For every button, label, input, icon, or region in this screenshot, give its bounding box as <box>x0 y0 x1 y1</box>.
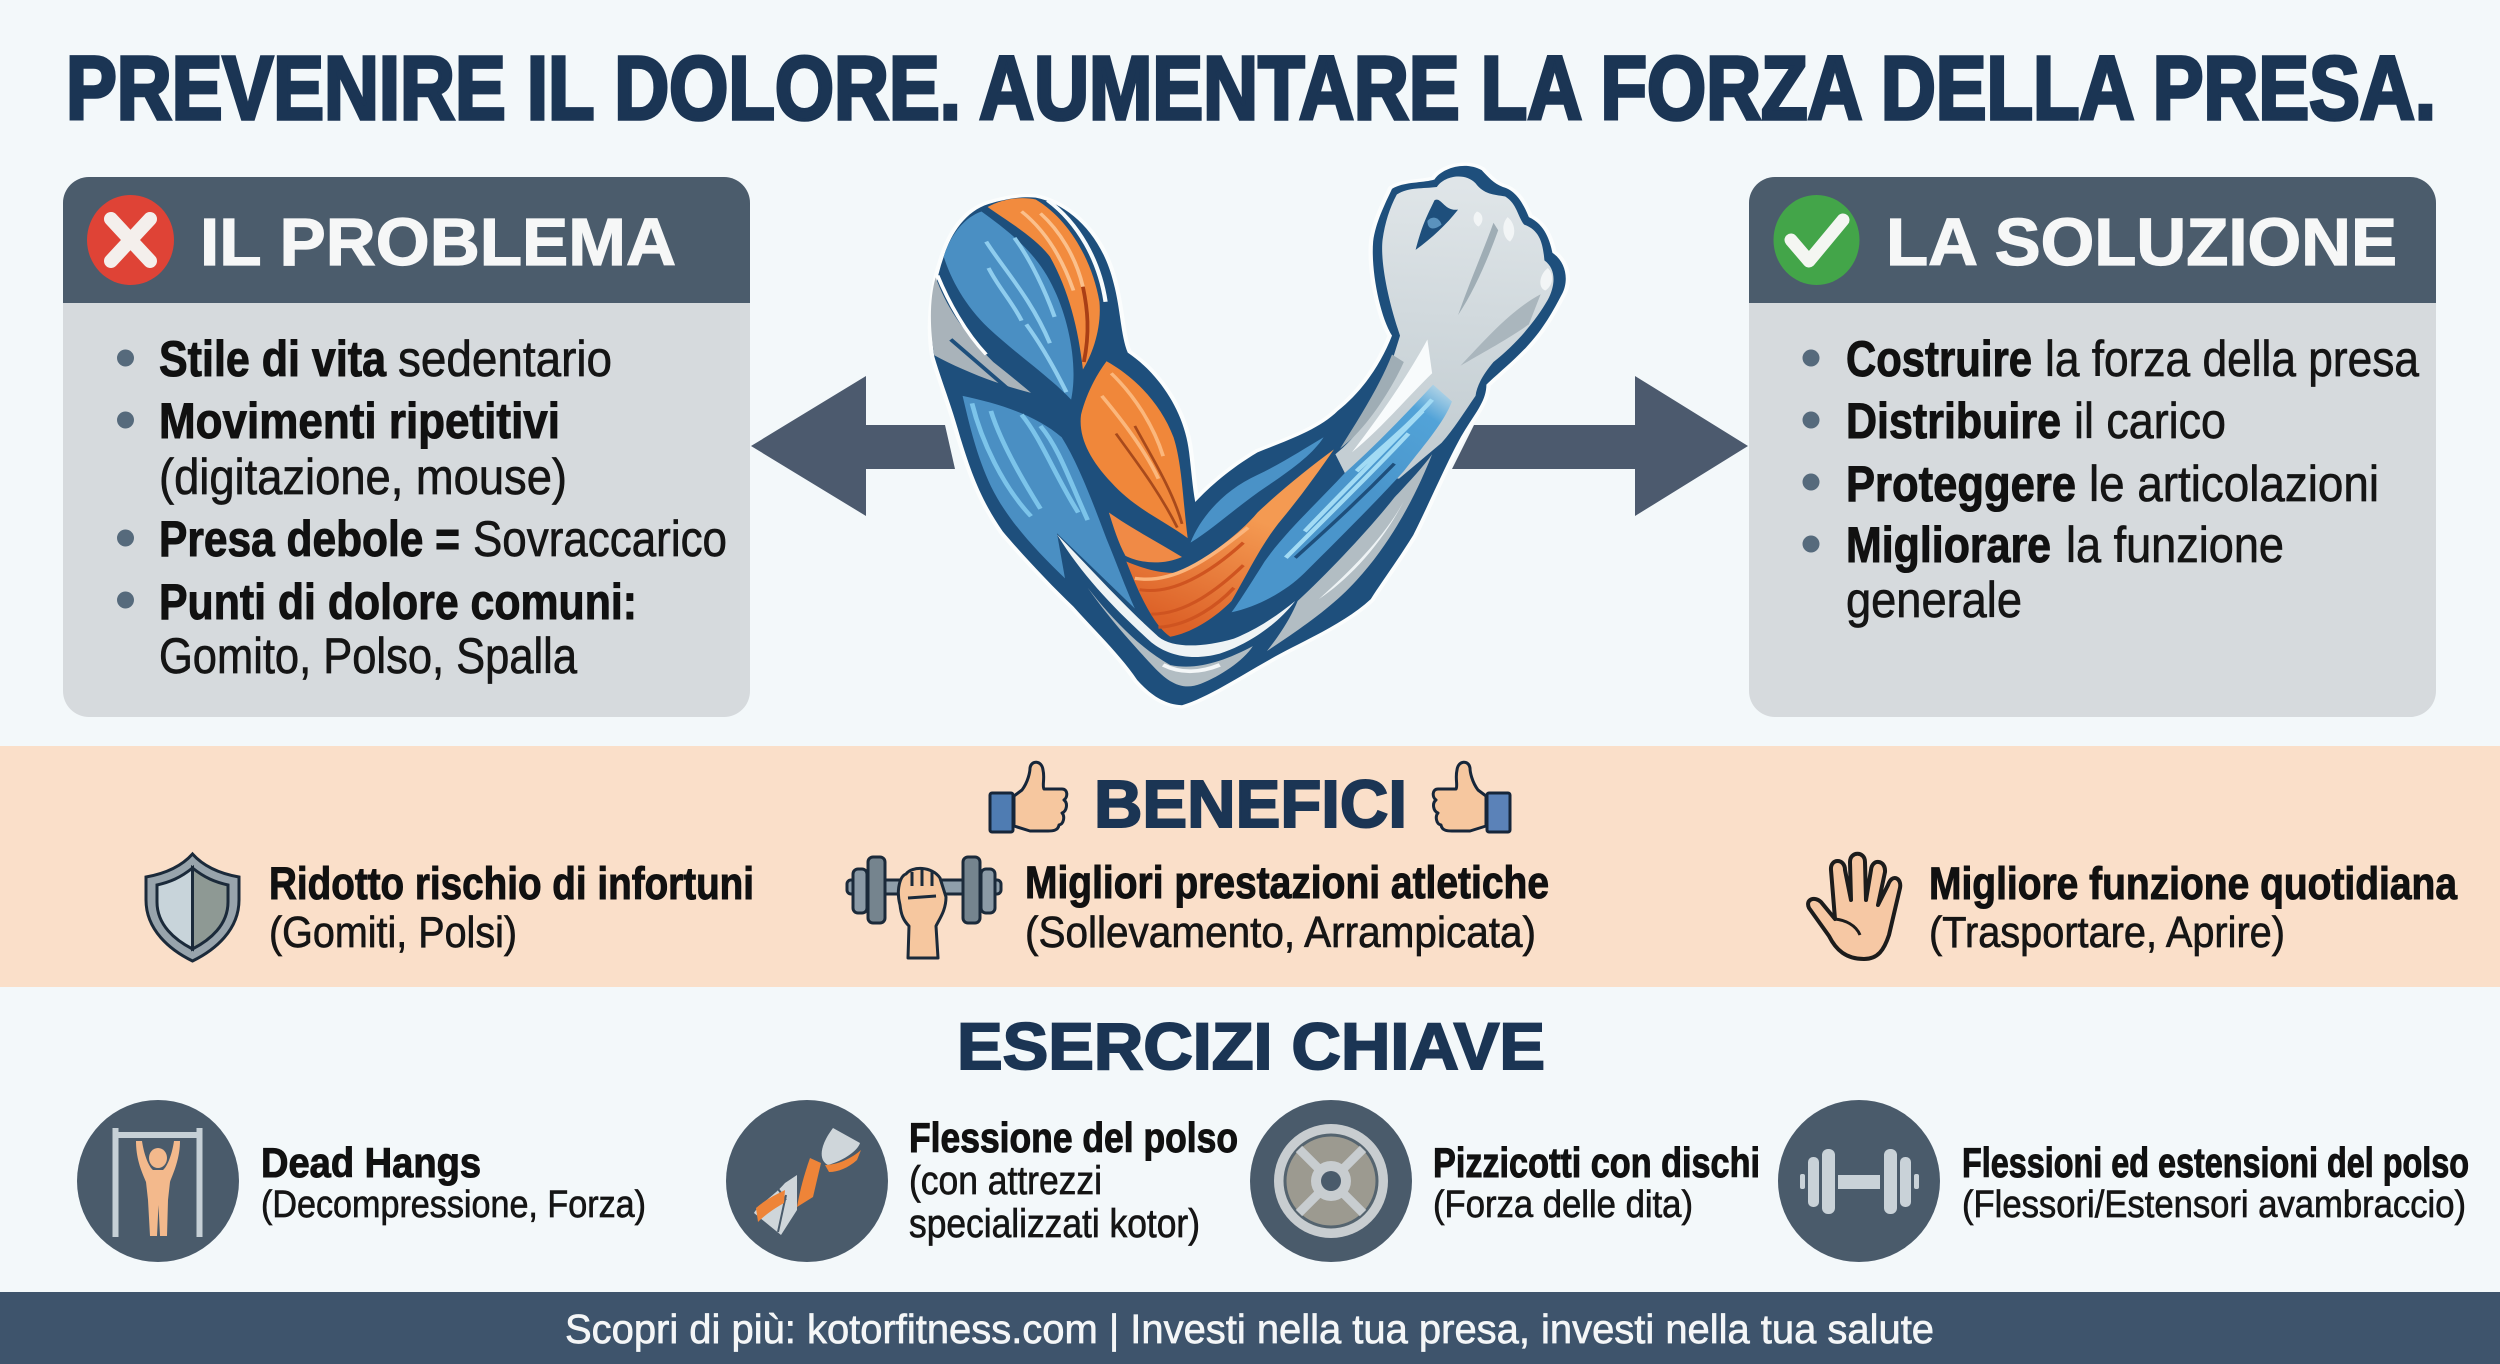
exercise text: Dead Hangs <box>261 1139 481 1186</box>
benefit text: infortuni <box>269 858 754 957</box>
list: problem items: (digitazione, mouse) <box>159 449 567 505</box>
benefit text: prestazioni: Migliori prestazioni atletiche <box>1025 857 1549 908</box>
icon: thumb up left <box>990 762 1067 832</box>
heading: benefici: BENEFICI <box>1094 767 1407 842</box>
list: solution items: Migliorare <box>1846 517 2051 573</box>
band: benefici <box>0 746 2500 987</box>
icon: pull-up figure <box>77 1100 239 1262</box>
triceps blue <box>963 396 1135 608</box>
exercise text: (Decompressione, Forza) <box>261 1184 646 1226</box>
list: solution items: il carico <box>2074 393 2226 449</box>
list: solution items: la funzione <box>2066 517 2284 573</box>
exercise text <box>1962 1139 2469 1226</box>
panel: il problema <box>63 177 750 717</box>
elbow orange <box>1109 513 1182 562</box>
icon: shield <box>146 854 239 961</box>
icon: open hand <box>1808 854 1900 959</box>
list: problem items: Movimenti ripetitivi <box>159 393 560 449</box>
exercise text <box>909 1114 1238 1246</box>
icon: twisted grip tool <box>726 1100 888 1262</box>
exercise text: Pizzicotti con dischi <box>1433 1139 1760 1186</box>
biceps orange <box>1081 361 1188 538</box>
list: problem items: Sovraccarico <box>473 511 727 567</box>
shoulder grey <box>931 277 1031 393</box>
list: problem items: Presa debole = <box>159 511 460 567</box>
benefit text: quotidiana: (Trasportare, Aprire) <box>1929 908 2285 957</box>
footer: Scopri di più: kotorfitness.com | Investi nella tua presa, investi nella tua salute <box>565 1306 1934 1352</box>
exercise: flessione del polso <box>726 1100 1238 1262</box>
exercise: flessioni ed estensioni <box>1778 1100 2469 1262</box>
deltoid orange <box>988 198 1100 370</box>
icon: thumb up right <box>1433 762 1510 832</box>
lower grey bands <box>1267 454 1432 651</box>
list: problem items: Punti di dolore comuni: <box>159 574 637 630</box>
forearm upper blue <box>1191 437 1324 543</box>
icon: weight plate <box>1250 1100 1412 1262</box>
heading: esercizi chiave: ESERCIZI CHIAVE <box>957 1009 1545 1083</box>
exercise text: (con attrezzi <box>909 1159 1102 1203</box>
benefit text: quotidiana <box>1929 858 2458 957</box>
outline <box>932 166 1566 705</box>
forearm orange <box>1126 449 1334 637</box>
deltoid blue <box>944 211 1074 400</box>
footer <box>0 1292 2500 1364</box>
exercise text <box>261 1139 646 1226</box>
list: solution items: Distribuire <box>1846 393 2061 449</box>
illustration: muscular arm <box>931 166 1566 705</box>
list: problem items: Gomito, Polso, Spalla <box>159 628 577 684</box>
exercise text: (Forza delle dita) <box>1433 1184 1693 1226</box>
exercise text: (Flessori/Estensori avambraccio) <box>1962 1184 2466 1226</box>
icon: red cross <box>87 195 174 285</box>
arrow: right <box>1452 376 1748 516</box>
exercise text: Flessione del polso <box>909 1114 1238 1161</box>
list: solution items <box>1802 331 2419 628</box>
icon: dumbbell <box>1778 1100 1940 1262</box>
benefit text: prestazioni: (Sollevamento, Arrampicata) <box>1025 908 1536 957</box>
benefit text: infortuni: Ridotto rischio di infortuni <box>269 858 754 909</box>
list: solution items: la forza della presa <box>2045 331 2419 387</box>
heading: la soluzione: LA SOLUZIONE <box>1886 205 2397 280</box>
icon: hand lifting dumbbell <box>847 857 1001 958</box>
panel: la soluzione <box>1749 177 2436 717</box>
benefit text: prestazioni <box>1025 857 1549 957</box>
benefit text: infortuni: (Gomiti, Polsi) <box>269 908 517 957</box>
list: solution items: Proteggere <box>1846 456 2076 512</box>
forearm grey and hand <box>1335 176 1554 479</box>
arrow: left <box>751 376 955 516</box>
list: solution items: Costruire <box>1846 331 2032 387</box>
exercise text <box>1433 1139 1760 1226</box>
list: solution items: generale <box>1846 572 2022 628</box>
exercise text: specializzati kotor) <box>909 1202 1200 1246</box>
list: solution items: le articolazioni <box>2089 456 2379 512</box>
forearm main blue <box>1232 385 1452 612</box>
list: problem items <box>117 331 727 684</box>
exercise: pizzicotti con dischi <box>1250 1100 1760 1262</box>
list: problem items: Stile di vita <box>159 331 387 387</box>
exercise: dead hangs <box>77 1100 646 1262</box>
icon: green check <box>1774 195 1860 285</box>
heading: il problema: IL PROBLEMA <box>200 205 676 280</box>
list: problem items: sedentario <box>398 331 612 387</box>
